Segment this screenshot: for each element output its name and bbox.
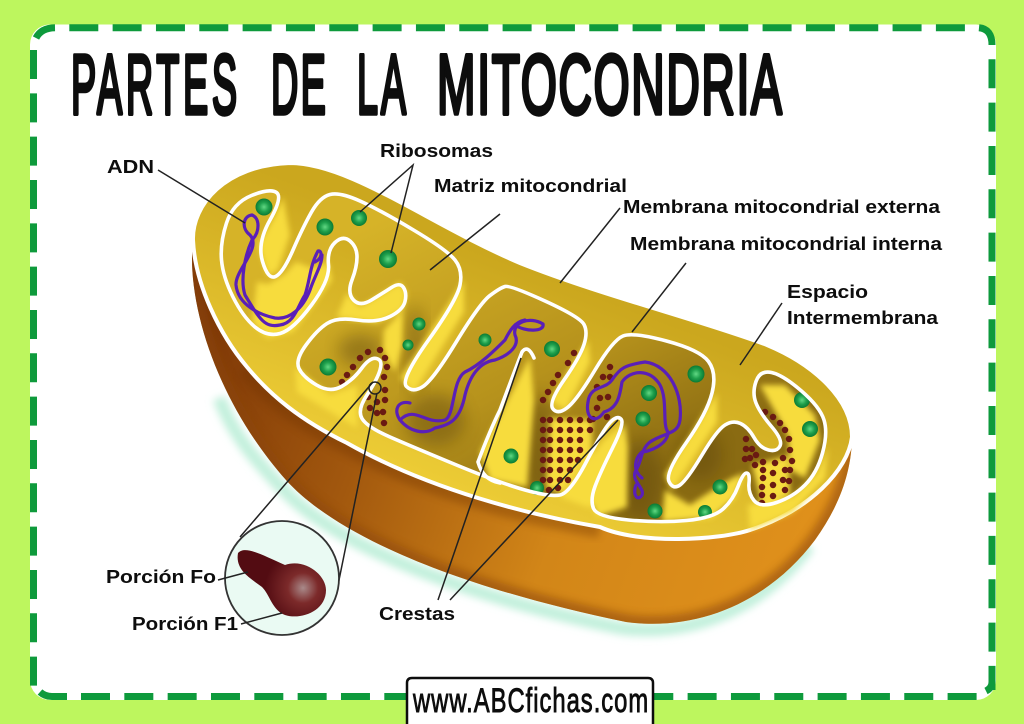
- floor shadows: [338, 305, 722, 520]
- title: DE: [271, 37, 326, 132]
- body lower edge shading: [192, 240, 852, 624]
- inner membrane: [221, 191, 826, 522]
- label: Membrana mitocondrial externa: [560, 196, 941, 283]
- label: ADN: ADN: [107, 156, 154, 177]
- footer website tag: www.ABCfichas.com: [412, 682, 648, 720]
- ribosomes: [256, 198, 818, 519]
- label: Espacio Intermembrana: Espacio: [787, 281, 868, 302]
- shadow under the mitochondrion: [219, 398, 809, 630]
- label: Membrana mitocondrial externa: Membrana mitocondrial externa: [623, 196, 941, 217]
- label: Porción F1: [132, 613, 282, 634]
- label: Membrana mitocondrial interna: Membrana mitocondrial interna: [630, 233, 943, 254]
- top rim surface: [193, 163, 852, 539]
- label: ADN: [107, 156, 245, 223]
- DNA strands: [236, 215, 680, 498]
- label: Porción F1: Porción F1: [132, 613, 238, 634]
- title: MITOCONDRIA: [437, 39, 782, 132]
- title: LA: [357, 37, 406, 132]
- bright crista walls: [252, 197, 828, 530]
- matrix floor: [221, 191, 826, 522]
- label: Porción Fo: Porción Fo: [106, 566, 216, 587]
- magnifier circle: [225, 521, 339, 635]
- title: PARTES: [71, 37, 237, 132]
- label: Espacio Intermembrana: [740, 281, 939, 365]
- label: Ribosomas: Ribosomas: [380, 140, 493, 161]
- title: [71, 37, 782, 132]
- label: Matriz mitocondrial: [430, 175, 627, 270]
- inset: ATP synthase zoom: [225, 382, 381, 635]
- label: Crestas: [379, 358, 618, 624]
- label: Espacio Intermembrana: Intermembrana: [787, 307, 939, 328]
- label: Crestas: Crestas: [379, 603, 455, 624]
- diagram: mitochondrion: [192, 163, 852, 630]
- zoom leader lines: [240, 382, 377, 585]
- label: Porción Fo: [106, 566, 248, 587]
- label: Membrana mitocondrial interna: [630, 233, 943, 332]
- label: Ribosomas: [360, 140, 493, 253]
- crista fold membrane: [478, 349, 534, 483]
- small source circle: [369, 382, 381, 394]
- outer body: [192, 240, 852, 624]
- ATP synthase particles: [342, 350, 792, 503]
- label: Matriz mitocondrial: Matriz mitocondrial: [434, 175, 627, 196]
- particle shape: [238, 550, 326, 616]
